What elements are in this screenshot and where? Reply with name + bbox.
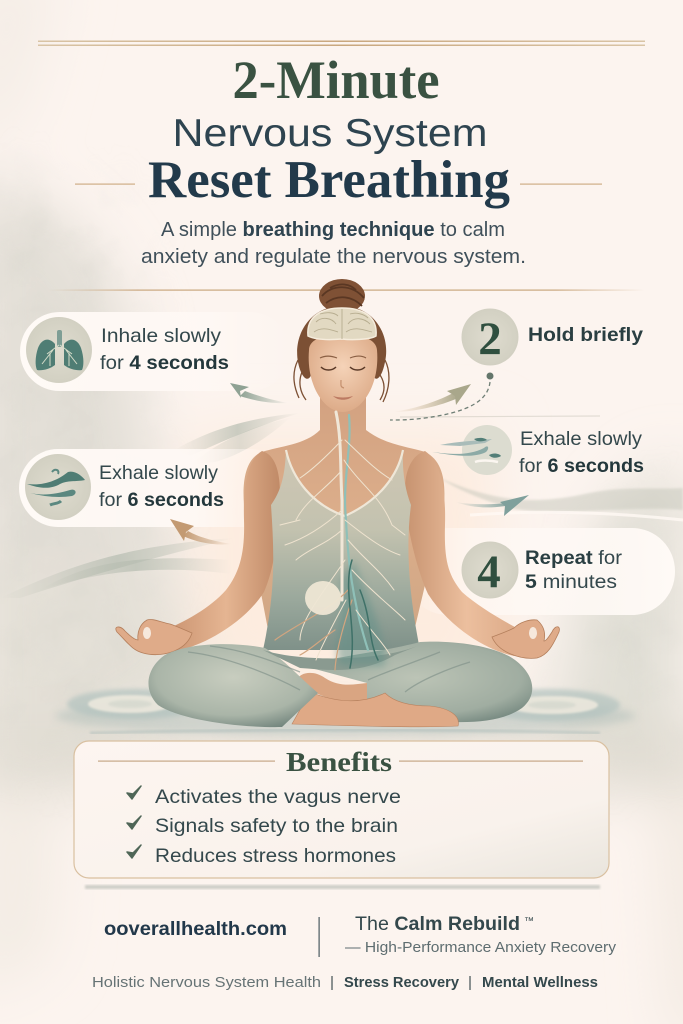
icon: exhale air <box>25 454 91 520</box>
icon: exhale air right <box>432 425 512 475</box>
panel shadow <box>85 885 600 889</box>
lower foot and shin <box>292 692 458 727</box>
text: exhale right <box>519 428 644 477</box>
text: inhale: for 4 seconds <box>100 352 229 374</box>
text: inhale: Inhale slowly <box>101 325 221 347</box>
title <box>75 50 602 209</box>
benefit 2: Signals safety to the brain <box>155 815 398 837</box>
head <box>309 334 377 412</box>
tank top <box>263 450 420 650</box>
water ripples <box>55 689 635 736</box>
text: repeat <box>525 547 623 593</box>
step: exhale right <box>432 425 644 477</box>
arrow: exhale left <box>170 519 232 545</box>
title: 2-Minute <box>232 50 440 110</box>
benefit 3: Reduces stress hormones <box>155 845 396 867</box>
footer: tagline: Mental Wellness <box>482 975 598 991</box>
footer: brand: — High-Performance Anxiety Recovery <box>345 939 617 956</box>
pill: inhale <box>20 312 290 391</box>
badge: 2 <box>462 308 518 366</box>
breath wisps right <box>400 416 683 520</box>
arrow: hold <box>392 384 471 412</box>
title: Reset Breathing <box>148 151 510 209</box>
pill: exhale left <box>19 449 289 527</box>
text: exhale right: Exhale slowly <box>520 428 642 450</box>
footer divider <box>318 917 320 957</box>
text: exhale right: for 6 seconds <box>519 455 644 477</box>
subtitle <box>141 219 526 268</box>
badge: 4 <box>462 542 518 598</box>
subtitle: A simple breathing technique to calm <box>161 219 505 241</box>
footer: tagline: | <box>468 975 472 991</box>
footer: brand <box>345 914 617 956</box>
text: exhale left <box>99 462 224 511</box>
top double rule <box>38 40 645 46</box>
benefits heading: Benefits <box>286 747 392 777</box>
crossed legs <box>148 642 532 727</box>
arrow: inhale <box>230 383 288 403</box>
figure: meditating woman <box>116 279 559 727</box>
face features <box>320 356 366 400</box>
subtitle: anxiety and regulate the nervous system. <box>141 246 526 268</box>
benefit 1: Activates the vagus nerve <box>155 786 401 808</box>
footer: brand: ™ <box>524 916 534 927</box>
text: repeat: Repeat for <box>525 547 623 569</box>
brain overlay <box>308 308 376 340</box>
text: exhale left: Exhale slowly <box>99 462 218 484</box>
left arm <box>160 451 280 652</box>
badge: 4: 4 <box>477 546 501 598</box>
footer: tagline: Holistic Nervous System Health <box>92 975 321 991</box>
right leg <box>300 642 532 722</box>
step 4: repeat pill <box>405 528 675 615</box>
text: exhale left: for 6 seconds <box>99 489 224 511</box>
stomach <box>305 581 341 615</box>
footer: website: ooverallhealth.com <box>104 919 287 940</box>
footer: tagline: | <box>330 975 334 991</box>
hands <box>116 619 559 658</box>
upper foot <box>297 673 367 702</box>
hair bun <box>294 279 389 402</box>
badge: 2: 2 <box>478 313 502 365</box>
footer: tagline <box>92 975 598 991</box>
section rule <box>48 290 645 291</box>
text: repeat: 5 minutes <box>525 571 617 593</box>
footer: tagline: Stress Recovery <box>344 975 459 991</box>
text: inhale <box>100 325 229 374</box>
arrow: exhale right <box>455 495 529 516</box>
neck and shoulders <box>244 392 444 640</box>
vagus nerve system <box>275 412 405 670</box>
right arm <box>405 451 528 656</box>
dashed connector <box>390 372 494 420</box>
text: hold: Hold briefly <box>528 324 643 346</box>
left leg <box>148 644 318 727</box>
panel: benefits <box>74 741 609 878</box>
icon: lungs <box>26 317 92 383</box>
step 2: hold <box>462 308 643 366</box>
breath wisps left <box>0 413 300 598</box>
footer: brand: The Calm Rebuild <box>355 914 520 935</box>
background <box>0 176 683 930</box>
title: Nervous System <box>172 112 488 155</box>
